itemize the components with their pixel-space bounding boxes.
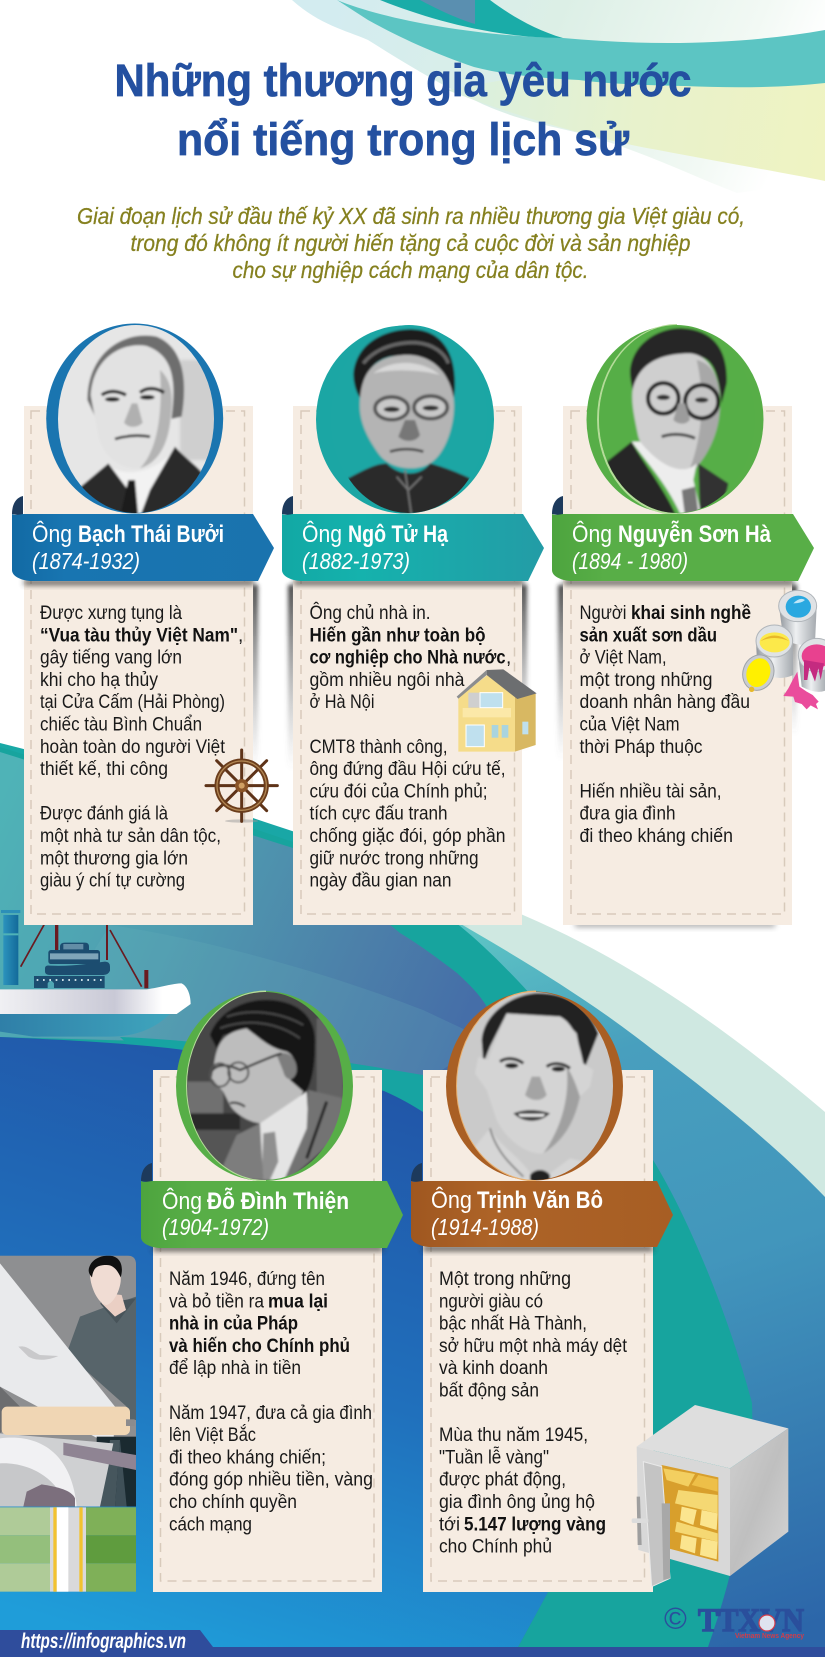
ribbon: Nguyễn Sơn Hà: Ông: [572, 520, 612, 548]
body text: Trịnh Văn Bô: người giàu có: [439, 1291, 543, 1312]
body text: Đỗ Đình Thiện: mua lại: [268, 1291, 328, 1312]
body text: Nguyễn Sơn Hà: đi theo kháng chiến: [580, 826, 733, 847]
body text: Đỗ Đình Thiện: Năm 1947, đưa cả gia đình: [169, 1403, 372, 1424]
body text: Nguyễn Sơn Hà: Hiến nhiều tài sản,: [580, 781, 722, 802]
body text: Đỗ Đình Thiện: đi theo kháng chiến;: [169, 1447, 326, 1468]
body text: Bạch Thái Bưởi: tại Cửa Cấm (Hải Phòng): [40, 692, 225, 713]
body text: Ngô Tử Hạ: ngày đầu gian nan: [310, 871, 452, 892]
intro text: [77, 203, 745, 283]
body text: Trịnh Văn Bô: "Tuần lễ vàng": [439, 1446, 549, 1468]
ribbon: Nguyễn Sơn Hà: [552, 496, 814, 585]
body text: Đỗ Đình Thiện: cho chính quyền: [169, 1492, 297, 1513]
body text: Ngô Tử Hạ: CMT8 thành công,: [310, 737, 448, 758]
portrait: Ngô Tử Hạ: [316, 325, 494, 514]
body text: Bạch Thái Bưởi: thiết kế, thi công: [40, 759, 168, 780]
panel: Trịnh Văn Bô: [411, 987, 673, 1592]
body text: Bạch Thái Bưởi: chiếc tàu Bình Chuẩn: [40, 714, 202, 736]
portrait: Nguyễn Sơn Hà: [580, 320, 767, 520]
body text: Ngô Tử Hạ: [310, 602, 511, 892]
body text: Trịnh Văn Bô: và kinh doanh: [439, 1358, 548, 1379]
body text: Trịnh Văn Bô: gia đình ông ủng hộ: [439, 1492, 595, 1513]
ribbon: Bạch Thái Bưởi: Bạch Thái Bưởi: [78, 521, 224, 548]
body text: Nguyễn Sơn Hà: ở Việt Nam,: [580, 648, 666, 669]
body text: Trịnh Văn Bô: được phát động,: [439, 1470, 566, 1491]
body text: Trịnh Văn Bô: cho Chính phủ: [439, 1537, 552, 1558]
body text: Nguyễn Sơn Hà: khai sinh nghề: [631, 603, 751, 624]
ribbon: Trịnh Văn Bô: Trịnh Văn Bô: [477, 1187, 603, 1214]
panel: Nguyễn Sơn Hà: [552, 320, 814, 927]
body text: Bạch Thái Bưởi: một thương gia lớn: [40, 848, 188, 869]
ribbon: Ngô Tử Hạ: Ngô Tử Hạ: [348, 521, 448, 548]
body text: Ngô Tử Hạ: cứu đói của Chính phủ;: [310, 781, 488, 802]
body text: Đỗ Đình Thiện: [169, 1269, 373, 1535]
icon: paint cans: [738, 590, 825, 709]
body text: Ngô Tử Hạ: ông đứng đầu Hội cứu tế,: [310, 759, 506, 780]
body text: Bạch Thái Bưởi: giàu ý chí tự cường: [40, 871, 185, 892]
body text: Đỗ Đình Thiện: lên Việt Bắc: [169, 1424, 256, 1446]
body text: Trịnh Văn Bô: sở hữu một nhà máy dệt: [439, 1336, 628, 1357]
body text: Đỗ Đình Thiện: và bỏ tiền ra: [169, 1291, 264, 1312]
intro text: trong đó không ít người hiến tặng cả cuộc đời và sản nghiệp: [130, 230, 691, 256]
ribbon: Nguyễn Sơn Hà: Nguyễn Sơn Hà: [618, 520, 771, 548]
ribbon: Trịnh Văn Bô: (1914-1988): [431, 1214, 539, 1240]
panel: Đỗ Đình Thiện: [141, 985, 403, 1592]
body text: Trịnh Văn Bô: bất động sản: [439, 1380, 539, 1402]
title: [114, 55, 692, 165]
body text: Bạch Thái Bưởi: ,: [238, 625, 243, 646]
printing scene illustration: [0, 1253, 136, 1592]
body text: Nguyễn Sơn Hà: đưa gia đình: [580, 804, 676, 825]
footer bar: [0, 1630, 825, 1657]
panel: Ngô Tử Hạ: [282, 320, 544, 925]
body text: Ngô Tử Hạ: giữ nước trong những: [310, 848, 478, 869]
ribbon: Trịnh Văn Bô: Ông: [431, 1186, 472, 1214]
body text: Đỗ Đình Thiện: để lập nhà in tiền: [169, 1358, 301, 1379]
ribbon: Đỗ Đình Thiện: Đỗ Đình Thiện: [207, 1187, 349, 1215]
body text: Bạch Thái Bưởi: [40, 603, 243, 892]
body text: Bạch Thái Bưởi: hoàn toàn do người Việt: [40, 737, 226, 758]
body text: Trịnh Văn Bô: 5.147 lượng vàng: [464, 1514, 606, 1535]
body text: Nguyễn Sơn Hà: một trong những: [580, 670, 712, 691]
body text: Bạch Thái Bưởi: gây tiếng vang lớn: [40, 648, 182, 669]
portrait: Bạch Thái Bưởi: [46, 320, 223, 520]
logo: TTXVN: [664, 1601, 804, 1640]
logo: TTXVN: ©: [664, 1601, 687, 1636]
body text: Ngô Tử Hạ: gồm nhiều ngôi nhà: [310, 670, 465, 691]
body text: Nguyễn Sơn Hà: Người: [580, 603, 626, 624]
icon: house: [457, 669, 537, 752]
body text: Đỗ Đình Thiện: cách mạng: [169, 1514, 252, 1535]
body text: Đỗ Đình Thiện: Năm 1946, đứng tên: [169, 1269, 325, 1290]
body text: Nguyễn Sơn Hà: [580, 603, 751, 847]
logo: TTXVN: TTXVN: [698, 1603, 804, 1639]
body text: Đỗ Đình Thiện: đóng góp nhiều tiền, vàng: [169, 1470, 373, 1491]
ribbon: Bạch Thái Bưởi: (1874-1932): [32, 548, 140, 574]
body text: Ngô Tử Hạ: cơ nghiệp cho Nhà nước: [310, 648, 506, 669]
ribbon: Bạch Thái Bưởi: [12, 496, 274, 585]
panel: Bạch Thái Bưởi: [12, 320, 274, 925]
body text: Ngô Tử Hạ: Hiến gần như toàn bộ: [310, 625, 486, 646]
portrait: Trịnh Văn Bô: [443, 987, 630, 1187]
title: Những thương gia yêu nước: [114, 55, 692, 106]
body text: Bạch Thái Bưởi: “Vua tàu thủy Việt Nam": [40, 625, 238, 646]
body text: Nguyễn Sơn Hà: của Việt Nam: [580, 714, 680, 736]
body text: Đỗ Đình Thiện: nhà in của Pháp: [169, 1314, 298, 1335]
body text: Bạch Thái Bưởi: Được đánh giá là: [40, 804, 168, 825]
body text: Ngô Tử Hạ: tích cực đấu tranh: [310, 804, 448, 825]
ribbon: Đỗ Đình Thiện: (1904-1972): [162, 1214, 269, 1240]
body text: Trịnh Văn Bô: tới: [439, 1514, 460, 1535]
body text: Đỗ Đình Thiện: và hiến cho Chính phủ: [169, 1336, 350, 1357]
ribbon: Nguyễn Sơn Hà: (1894 - 1980): [572, 548, 688, 574]
body text: Nguyễn Sơn Hà: doanh nhân hàng đầu: [580, 692, 750, 713]
body text: Trịnh Văn Bô: [439, 1269, 628, 1558]
portrait: Đỗ Đình Thiện: [176, 985, 353, 1185]
body text: Ngô Tử Hạ: ở Hà Nội: [310, 692, 374, 713]
icon: ship wheel: [206, 750, 277, 823]
ribbon: Bạch Thái Bưởi: Ông: [32, 520, 72, 548]
ribbon: Ngô Tử Hạ: [282, 496, 544, 585]
body text: Nguyễn Sơn Hà: sản xuất sơn dầu: [580, 625, 717, 646]
body text: Trịnh Văn Bô: Mùa thu năm 1945,: [439, 1425, 588, 1446]
body text: Ngô Tử Hạ: chống giặc đói, góp phần: [310, 826, 506, 847]
body text: Bạch Thái Bưởi: Được xưng tụng là: [40, 603, 182, 624]
icon: gold safe: [632, 1405, 788, 1587]
intro text: cho sự nghiệp cách mạng của dân tộc.: [232, 257, 588, 283]
footer url: https://infographics.vn: [21, 1630, 186, 1653]
intro text: Giai đoạn lịch sử đầu thế kỷ XX đã sinh ra nhiều thương gia Việt giàu có,: [77, 203, 745, 229]
ribbon: Đỗ Đình Thiện: Ông: [162, 1187, 202, 1215]
ribbon: Ngô Tử Hạ: Ông: [302, 520, 342, 548]
body text: Trịnh Văn Bô: Một trong những: [439, 1269, 571, 1290]
body text: Nguyễn Sơn Hà: thời Pháp thuộc: [580, 737, 702, 758]
logo: TTXVN: Vietnam News Agency: [735, 1633, 804, 1640]
body text: Bạch Thái Bưởi: khi cho hạ thủy: [40, 670, 158, 691]
body text: Trịnh Văn Bô: bậc nhất Hà Thành,: [439, 1314, 587, 1335]
title: nổi tiếng trong lịch sử: [177, 114, 629, 165]
ship illustration: [0, 896, 191, 1037]
body text: Bạch Thái Bưởi: một nhà tư sản dân tộc,: [40, 826, 221, 847]
ribbon: Ngô Tử Hạ: (1882-1973): [302, 548, 410, 574]
body text: Ngô Tử Hạ: Ông chủ nhà in.: [310, 602, 430, 624]
ribbon: Trịnh Văn Bô: [411, 1163, 673, 1251]
ribbon: Đỗ Đình Thiện: [141, 1163, 403, 1251]
body text: Ngô Tử Hạ: ,: [506, 648, 511, 669]
